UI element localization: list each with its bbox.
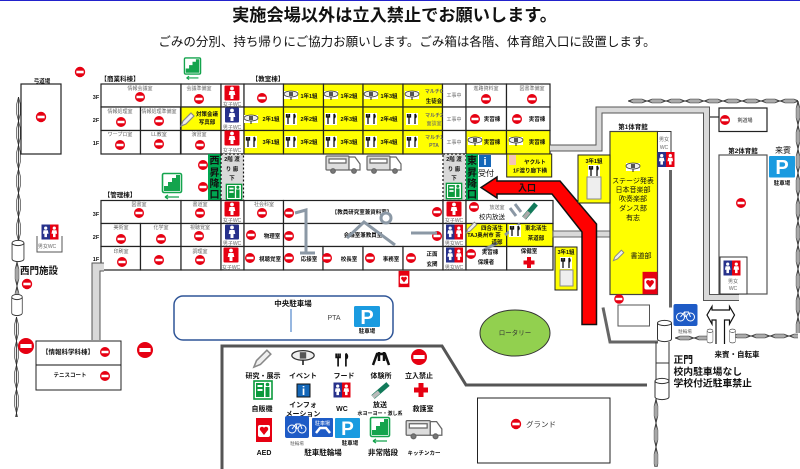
panel: admin building: 視聴覚室 xyxy=(190,224,210,231)
panel: admin building: 社会科室 xyxy=(254,201,274,208)
panel: admin building: 男子WC xyxy=(223,240,242,247)
panel: commerce building: 3F xyxy=(93,95,100,101)
panel: yakult: 1F渡り廊下横 xyxy=(513,166,547,174)
no entries by west entrance xyxy=(198,160,208,192)
panel: commerce building: 1F xyxy=(93,141,100,147)
panel: admin building: 化学室 xyxy=(153,224,169,231)
panel: gym 2: 第2体育館 xyxy=(728,146,758,155)
panel: gym 2 xyxy=(719,146,767,294)
text: main gate note: 学校付近駐車禁止 xyxy=(674,376,752,390)
legend: 駐車場 xyxy=(342,439,359,447)
panel: broadcast room labels: 保護者 xyxy=(478,258,495,266)
panel: ground xyxy=(478,398,610,463)
panel: information science building: テニスコート xyxy=(53,372,87,379)
panel: classroom building: 2年2組 xyxy=(300,115,318,123)
text: main gate note xyxy=(674,354,752,390)
legend: フード xyxy=(334,372,354,380)
legend: 体験所 xyxy=(370,371,392,380)
text: main gate note: 校内駐車場なし xyxy=(674,365,742,378)
panel: classroom building: 1年2組 xyxy=(340,92,358,100)
panel: admin building: 2F xyxy=(93,235,100,241)
icon: kitchen cars xyxy=(326,156,401,173)
panel: admin building: 応接室 xyxy=(301,255,318,263)
legend: 非常階段 xyxy=(368,447,398,457)
reception xyxy=(478,155,494,178)
text: visitors and bicycles: 来賓・自転車 xyxy=(714,349,760,359)
guest parking: P xyxy=(775,157,789,179)
panel: classroom building: 生徒会 xyxy=(426,97,443,105)
panel: admin building: 3F xyxy=(93,212,100,218)
icon: emergency stairs lower xyxy=(162,174,182,199)
panel: gym 1: 日本音楽部 xyxy=(616,185,650,194)
panel: commerce building: 情報処理準備室 xyxy=(141,108,177,115)
arrow: entrance: 入口 xyxy=(518,183,536,193)
panel: kendo hall xyxy=(719,108,767,132)
west corridor xyxy=(221,154,244,200)
panel: admin building: 男女WC xyxy=(445,264,464,271)
panel: classroom building: 2年3組 xyxy=(340,115,358,123)
legend: AED xyxy=(257,450,271,457)
panel: information science building xyxy=(36,341,121,390)
reception: i xyxy=(483,156,487,168)
west entrance strip xyxy=(208,154,221,201)
legend: 駐輪場 xyxy=(290,440,304,447)
west gate facilities: 西門施設 xyxy=(20,265,58,277)
legend: 水ヨーヨー・激し系 xyxy=(357,410,403,417)
reception: 受付 xyxy=(478,168,494,178)
panel: classroom building: 2年1組 xyxy=(262,115,280,123)
east corridor: 下 xyxy=(451,175,457,182)
panel: classroom building: 工事中 xyxy=(446,139,462,146)
title: 実施会場以外は立入禁止でお願いします。 xyxy=(232,5,557,25)
building: archery hall xyxy=(21,77,61,154)
panel: commerce building: 2F xyxy=(93,118,100,124)
panel: gym 1: 男女 xyxy=(659,136,669,143)
panel: classroom building: 3年2組 xyxy=(300,138,318,146)
legend: 研究・展示 xyxy=(246,371,280,380)
legend: メーション xyxy=(286,411,320,418)
panel: classroom building: 1年1組 xyxy=(300,92,318,100)
panel: commerce building: 情報処理室 xyxy=(107,108,133,115)
rotary xyxy=(480,310,550,356)
west entrance strip: 口 xyxy=(210,190,220,201)
panel: 3rd grade stall upper: 3年1組 xyxy=(585,157,603,165)
panel: classroom building: マルチ2 xyxy=(425,113,443,119)
legend: 放送 xyxy=(373,400,387,409)
panel: classroom building xyxy=(244,74,550,154)
panel: classroom building: PTA xyxy=(429,143,439,149)
panel: admin building: 女子WC xyxy=(445,217,464,224)
legend: 救護室 xyxy=(412,404,434,413)
panel: ground: グランド xyxy=(526,419,556,429)
panel: broadcast room labels xyxy=(466,202,547,268)
panel: classroom building: 3年4組 xyxy=(380,138,398,146)
panel: admin building: 【管理棟】 xyxy=(104,190,136,199)
panel: 3rd grade stall upper xyxy=(578,155,610,203)
panel: admin building: 印刷室 xyxy=(113,248,129,255)
panel: classroom building: 2年4組 xyxy=(380,115,398,123)
gray road around gym xyxy=(550,110,739,298)
panel: admin building: 【教員研究室兼資料室】 xyxy=(332,208,392,216)
panel: admin building: 校長室 xyxy=(341,255,358,263)
building: archery hall: 弓道場 xyxy=(34,77,51,85)
arrow: fork xyxy=(707,306,734,344)
panel: admin building: 美術室 xyxy=(113,224,129,231)
panel: commerce building: 演習室 xyxy=(191,131,207,138)
panel: broadcast room labels: 放送室 xyxy=(489,204,505,211)
west entrance strip: 昇 xyxy=(210,167,220,179)
legend: WC xyxy=(336,406,348,413)
panel: broadcast room labels: 保健室 xyxy=(521,247,538,255)
west corridor: 2階 渡 xyxy=(224,155,240,163)
east corridor: り 廊 xyxy=(448,165,461,173)
panel: admin building: 会議室兼教員室 xyxy=(344,231,383,239)
panel: admin building: 女子WC xyxy=(222,264,241,271)
legend: P xyxy=(341,419,354,440)
legend: 立入禁止 xyxy=(405,371,433,380)
panel: classroom building: 実習棟 xyxy=(529,138,546,146)
guest parking: 来賓 xyxy=(775,145,791,155)
panel: commerce building: 対策会議 xyxy=(196,110,218,118)
panel: gym 1: 書道部 xyxy=(630,251,652,260)
panel: gym 1: ダンス部 xyxy=(619,204,647,212)
panel: commerce building: 写真部 xyxy=(199,118,216,126)
panel: central parking: P xyxy=(360,307,374,329)
east entrance strip: 東 xyxy=(467,154,477,167)
panel: broadcast room labels: TAJ奥州市 茶 xyxy=(467,231,501,239)
panel: broadcast room labels: 実習棟 xyxy=(482,248,499,256)
panel: gym 1: 有志 xyxy=(626,213,640,222)
panel: commerce building: 会議準備室 xyxy=(186,85,212,92)
panel: admin building: 視聴覚室 xyxy=(259,255,281,263)
legend: 駐車場 xyxy=(315,420,330,427)
panel: classroom building: 実習棟 xyxy=(529,115,546,123)
panel: classroom building: 実習棟 xyxy=(484,138,501,146)
panel: classroom building: 1年3組 xyxy=(380,92,398,100)
panel: commerce building: 男子WC xyxy=(223,124,242,131)
panel: commerce building xyxy=(93,74,244,154)
panel: yakult xyxy=(507,154,552,177)
legend: インフォ xyxy=(289,401,317,409)
legend: キッチンカー xyxy=(407,450,441,457)
panel: gym 1: WC xyxy=(660,145,669,151)
panel: broadcast room labels: 東北活生 xyxy=(525,224,547,232)
no entry: top left xyxy=(75,67,85,77)
panel: admin building xyxy=(93,190,553,271)
guest parking xyxy=(769,145,795,187)
text: main gate note: 正門 xyxy=(674,354,693,366)
panel: classroom building: マルチC xyxy=(425,89,444,95)
panel: central parking xyxy=(174,296,393,340)
legend: i xyxy=(302,384,305,398)
left gray road xyxy=(96,267,104,340)
east entrance strip xyxy=(466,154,478,201)
panel: yakult: ヤクルト xyxy=(524,158,546,166)
panel: commerce building: ワープロ室 xyxy=(108,131,132,138)
arrow: entrance xyxy=(481,177,596,324)
panel: classroom building: マルチ1 xyxy=(425,135,443,141)
panel: information science building: 【情報科学科棟】 xyxy=(42,347,94,356)
panel: classroom building: 進路資料室 xyxy=(473,85,499,92)
panel: classroom building: 実習棟 xyxy=(484,115,501,123)
west corridor: り 廊 xyxy=(226,165,239,173)
panel: classroom building: 工事中 xyxy=(446,92,462,99)
legend: 自販機 xyxy=(252,404,272,413)
panel: admin building: 物理室 xyxy=(264,232,281,240)
panel: central parking: 中央駐車場 xyxy=(274,298,312,308)
west gate facilities xyxy=(20,265,58,289)
legend: 駐車駐輪場 xyxy=(304,447,342,457)
west entrance strip: 降 xyxy=(210,177,220,190)
panel: classroom building: 3年1組 xyxy=(262,138,280,146)
west corridor: 下 xyxy=(229,175,235,182)
east entrance strip: 昇 xyxy=(467,167,477,179)
grey overlay strokes xyxy=(295,204,521,253)
panel: classroom building: 3年3組 xyxy=(340,138,358,146)
icon: bicycle parking: 駐輪場 xyxy=(678,328,692,335)
panel: kendo hall: 剣道場 xyxy=(737,117,753,124)
panel: gym 1: ステージ発表 xyxy=(612,176,654,185)
panel: broadcast room labels: 四合活生 xyxy=(481,224,503,232)
panel: commerce building: LL教室 xyxy=(151,131,167,138)
panel: commerce building: 女子WC xyxy=(223,101,242,108)
panel: commerce building: 女子WC xyxy=(223,147,242,154)
panel: classroom building: 図書準備室 xyxy=(519,85,545,92)
panel: admin building: 書道室 xyxy=(192,201,208,208)
panel: classroom building: 【教室棟】 xyxy=(252,74,284,83)
panel: admin building: 正面 xyxy=(426,251,438,258)
panel: commerce building: 【商業科棟】 xyxy=(100,74,140,83)
east corridor: 2階 渡 xyxy=(446,155,462,163)
panel: gym 2: WC xyxy=(729,286,738,292)
panel: admin building: 玄関 xyxy=(426,260,438,268)
legend: イベント xyxy=(289,372,317,380)
campus fences xyxy=(14,97,800,467)
panel: broadcast room labels: 茶道部 xyxy=(528,234,545,242)
panel: 3rd grade stall lower: 3年1組 xyxy=(557,248,575,256)
east entrance strip: 口 xyxy=(467,190,477,201)
panel: broadcast room labels: 道部 xyxy=(491,238,503,246)
panel: admin building: 調理室 xyxy=(192,248,208,255)
gray fences by gate xyxy=(603,170,670,342)
panel: classroom building: 工事中 xyxy=(446,116,462,123)
panel: admin building: 1F xyxy=(93,257,100,263)
west WC xyxy=(37,224,62,252)
legend xyxy=(222,346,647,469)
west WC: 男女WC xyxy=(38,243,57,250)
east entrance strip: 降 xyxy=(467,177,477,190)
panel: gym 1: 吹奏楽部 xyxy=(619,194,647,203)
panel: gym 1 xyxy=(610,122,674,294)
guest parking: 駐車場 xyxy=(774,179,791,187)
icon: AED outside admin building xyxy=(399,271,409,287)
no entry: left large xyxy=(18,338,153,358)
gate cylinders xyxy=(12,240,735,400)
panel: broadcast room labels: 校内放送 xyxy=(479,212,506,221)
icon: bicycle parking xyxy=(674,304,698,335)
icon: emergency stairs upper xyxy=(184,58,201,80)
panel: gym 2: 男女 xyxy=(728,278,738,285)
east corridor xyxy=(443,154,466,200)
west entrance strip: 西 xyxy=(210,155,220,167)
subtitle: ごみの分別、持ち帰りにご協力お願いします。ごみ箱は各階、体育館入口に設置します。 xyxy=(158,34,656,49)
panel: classroom building: 面談室 xyxy=(426,120,442,127)
panel: admin building: 男女WC xyxy=(445,240,464,247)
panel: admin building: 事務室 xyxy=(383,255,400,263)
panel: admin building: 女子WC xyxy=(223,217,242,224)
small box near gate xyxy=(614,294,650,326)
panel: central parking: 駐車場 xyxy=(359,327,376,335)
panel: commerce building: 情報会議室 xyxy=(127,85,153,92)
panel: admin building: 図書室 xyxy=(131,201,147,208)
panel: gym 1: 第1体育館 xyxy=(618,122,648,131)
rotary: ロータリー xyxy=(499,328,531,337)
panel: 3rd grade stall lower xyxy=(555,247,577,290)
panel: central parking: PTA xyxy=(327,315,341,322)
